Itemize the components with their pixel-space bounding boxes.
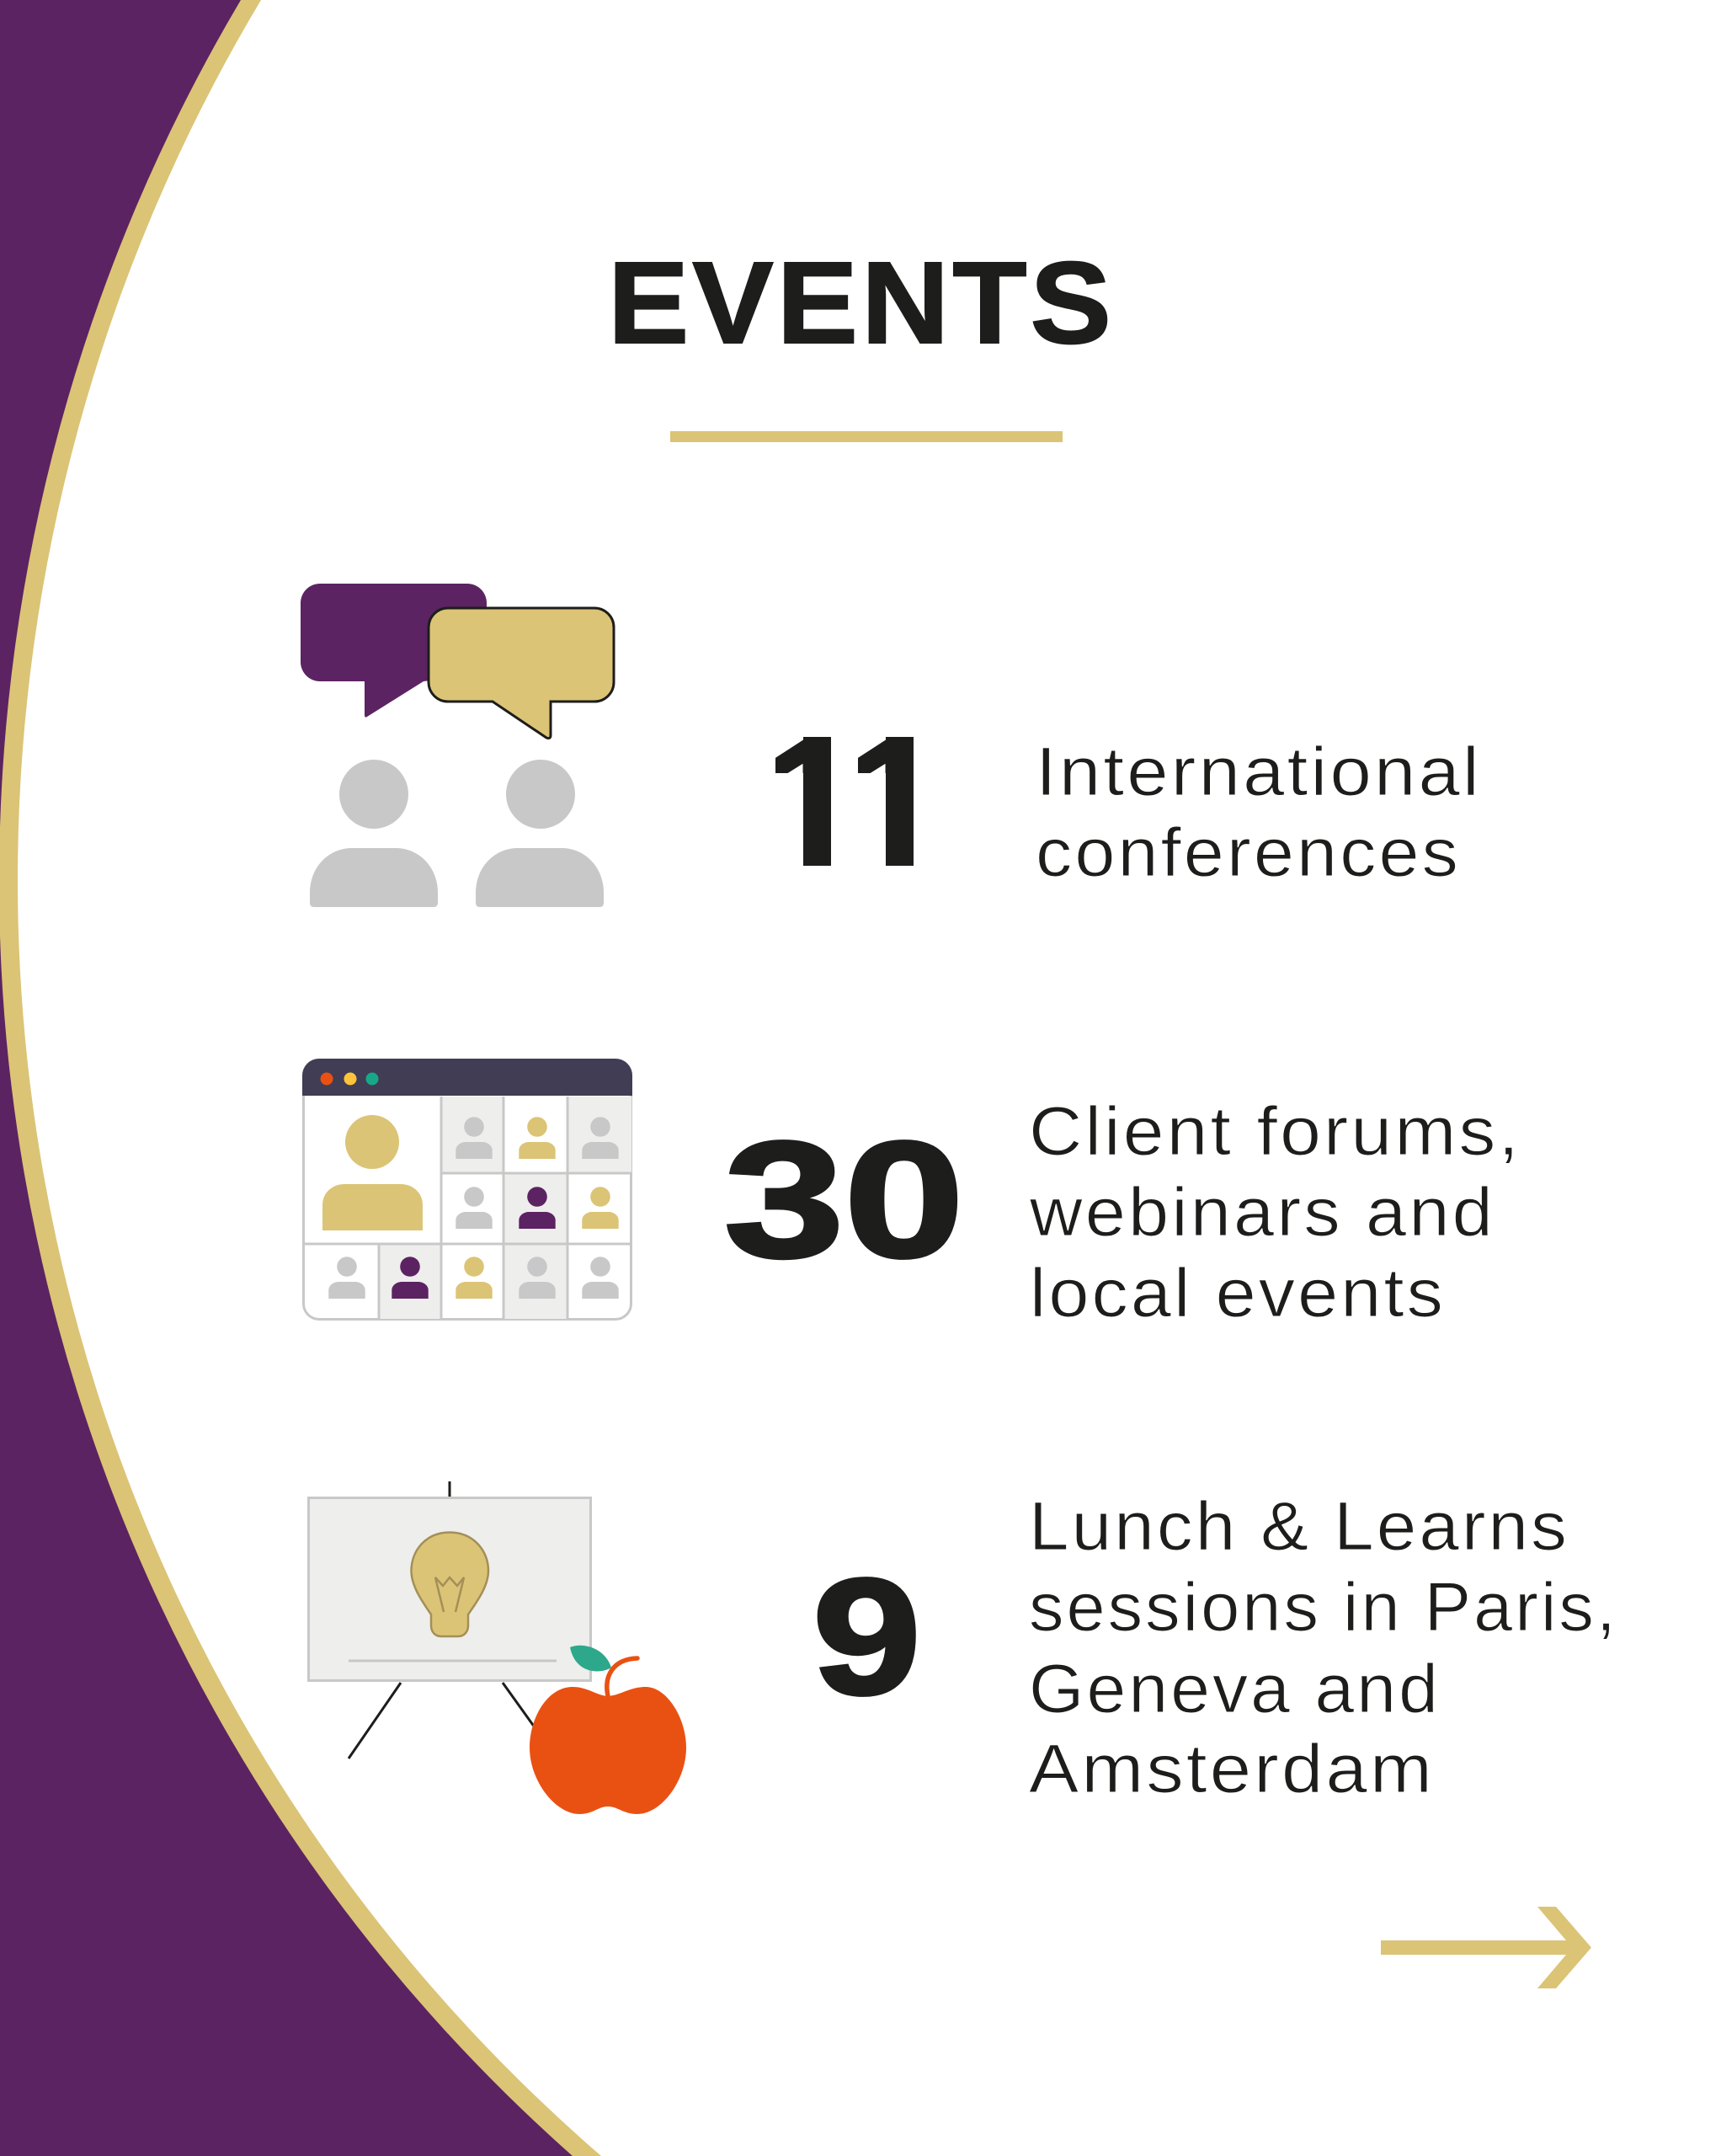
title underline (670, 431, 1063, 442)
row: lunch and learns sessions (308, 1481, 1618, 1814)
number: 11: 11 (764, 703, 944, 899)
icon: video call window (302, 1059, 632, 1319)
icon: presentation board with apple (308, 1481, 686, 1814)
row: client forums, webinars and local events (302, 1059, 1521, 1331)
number: 9: 9 (813, 1545, 921, 1729)
number: 30: 30 (724, 1107, 964, 1292)
label: lunch and learns sessions: Lunch & Learns (1029, 1488, 1569, 1565)
label: lunch and learns sessions: Geneva and (1029, 1651, 1441, 1727)
label: lunch and learns sessions (1029, 1488, 1618, 1807)
label: client forums, webinars and local events (1029, 1093, 1521, 1331)
number: 11 (775, 737, 914, 866)
icon: speech bubbles and two people (301, 584, 614, 907)
label: lunch and learns sessions: sessions in Paris, (1029, 1569, 1618, 1646)
label: lunch and learns sessions: Amsterdam (1029, 1731, 1435, 1807)
label: client forums, webinars and local events: local events (1030, 1255, 1446, 1331)
label: client forums, webinars and local events: webinars and (1029, 1174, 1495, 1251)
label: client forums, webinars and local events: Client forums, (1029, 1093, 1521, 1170)
arrow (1381, 1907, 1591, 1988)
row: international conferences (301, 584, 1482, 907)
label: international conferences: International (1036, 734, 1482, 810)
label: international conferences (1036, 734, 1482, 891)
title: EVENTS (608, 238, 1115, 368)
background curve: purple with gold edge (0, 0, 601, 2156)
label: international conferences: conferences (1036, 814, 1461, 891)
